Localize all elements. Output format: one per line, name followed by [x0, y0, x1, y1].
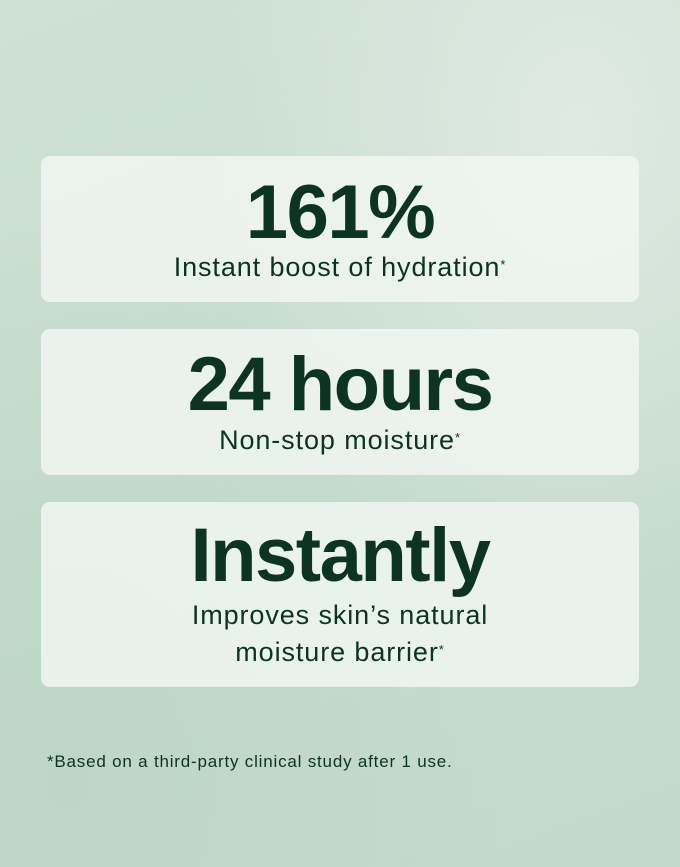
card: Instantly [41, 502, 639, 687]
stat: 24 hours: 24 hours [188, 342, 492, 427]
footnote: *Based on a third-party clinical study after 1 use. [47, 752, 453, 771]
caption: moisture: Non-stop moisture* [219, 425, 461, 455]
card: 24 hours [41, 329, 639, 475]
stat: Instantly: Instantly [190, 513, 490, 598]
caption: hydration: Instant boost of hydration* [174, 252, 506, 282]
caption: barrier [192, 600, 488, 667]
stat: 161%: 161% [246, 170, 434, 255]
card: 161% [41, 156, 639, 302]
caption: barrier: Improves skin’s natural [192, 600, 488, 630]
caption: barrier: moisture barrier* [235, 637, 445, 667]
